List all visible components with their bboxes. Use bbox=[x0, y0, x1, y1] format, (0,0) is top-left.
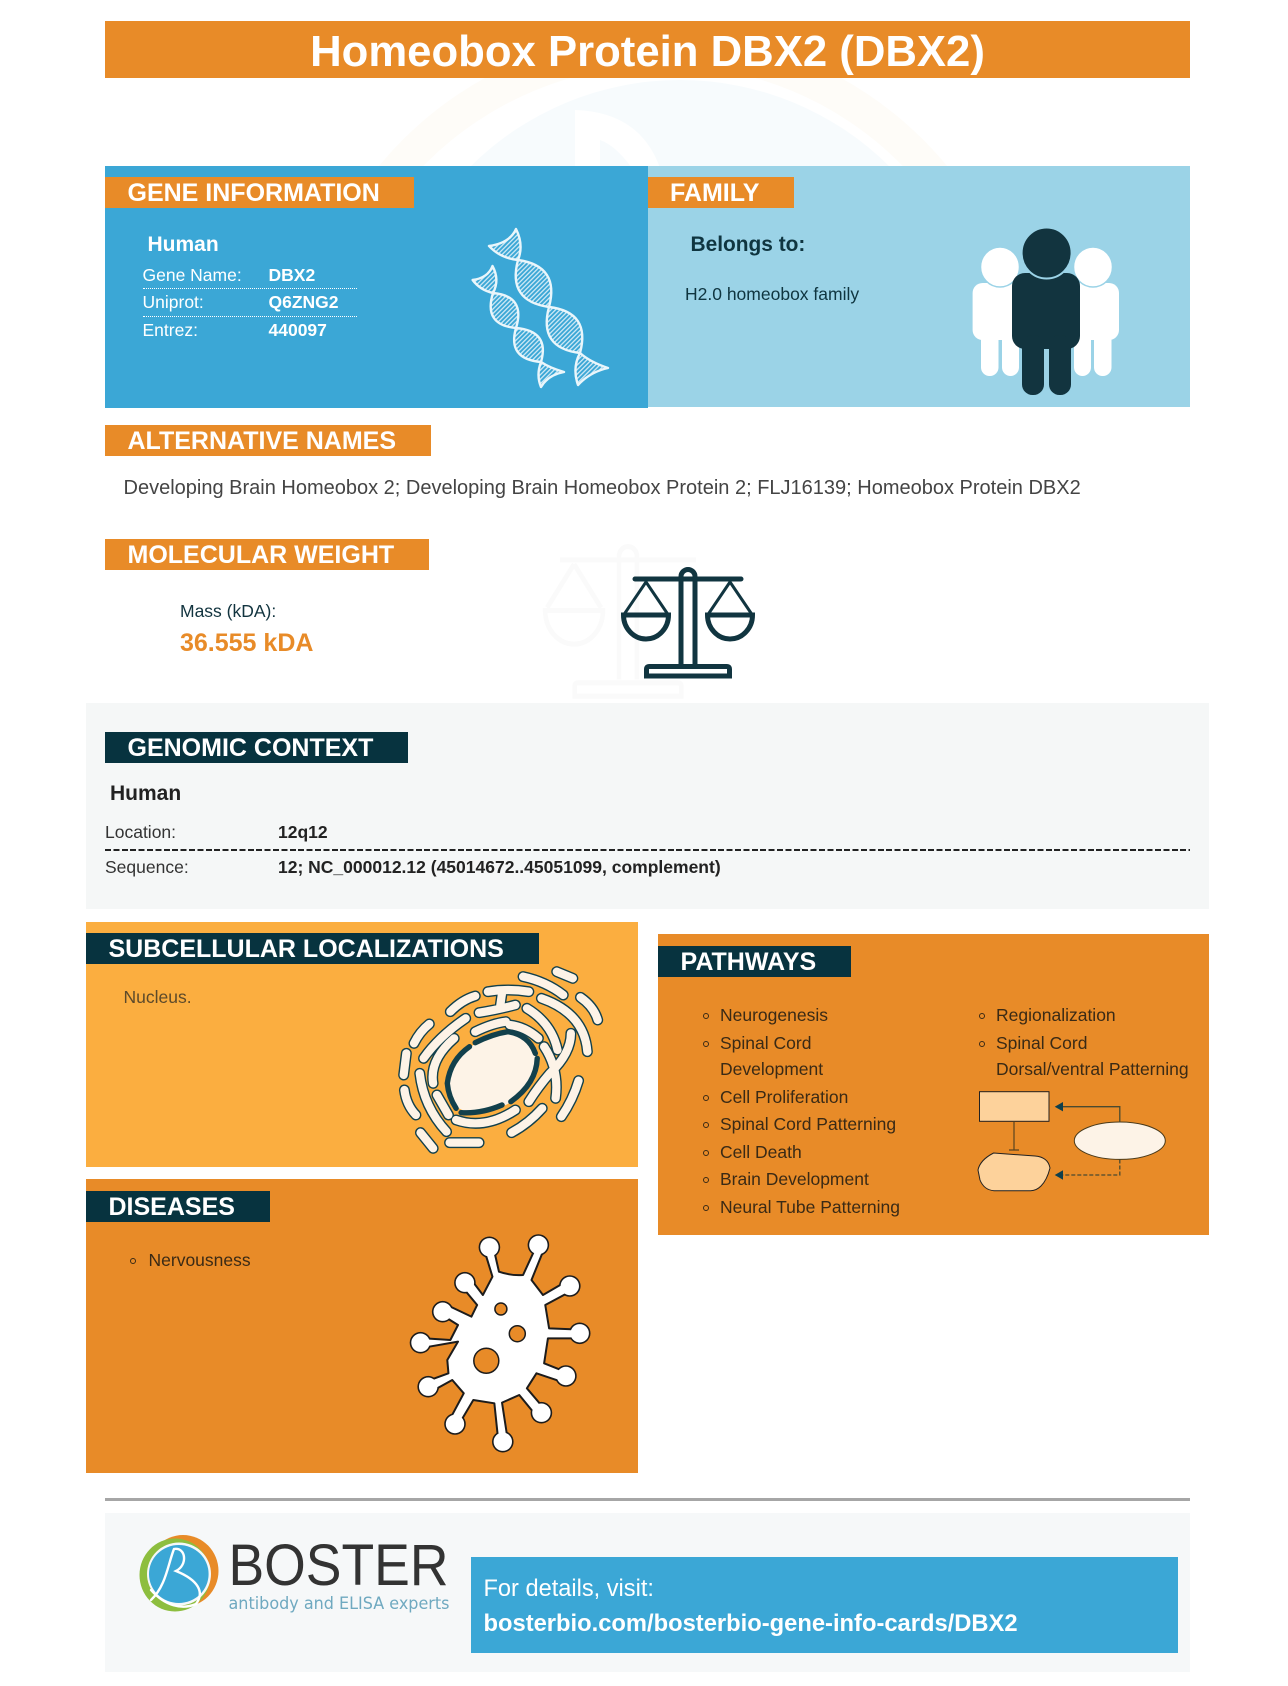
logo: Boster bbox=[140, 1533, 450, 1614]
call to action label: For details, visit: bbox=[484, 1576, 654, 1602]
panel: pathways bbox=[658, 934, 1209, 1235]
panel: family bbox=[648, 166, 1190, 406]
panel: diseases bbox=[86, 1179, 638, 1473]
icon: balance scales bbox=[621, 567, 755, 678]
watermark: faint logo behind title bbox=[370, 78, 960, 168]
uniprot row: Uniprot: bbox=[142, 292, 204, 312]
location row bbox=[105, 822, 328, 842]
entrez row: 440097 bbox=[268, 320, 327, 340]
logo mark bbox=[140, 1535, 218, 1612]
heading: family bbox=[648, 177, 794, 208]
panel: subcellular localizations bbox=[86, 922, 638, 1167]
entrez row bbox=[142, 320, 327, 340]
heading: family: FAMILY bbox=[670, 179, 759, 207]
icon: DNA double helix bbox=[471, 228, 610, 388]
list: pathways right column: Spinal Cord bbox=[996, 1033, 1087, 1053]
list: pathways right column bbox=[979, 1005, 1189, 1079]
call to action box bbox=[471, 1557, 1178, 1653]
list: pathways left column: Development bbox=[720, 1059, 823, 1079]
icon: virus bbox=[410, 1234, 590, 1452]
text: localization: Nucleus. bbox=[124, 987, 192, 1007]
icon: pathway diagram bbox=[978, 1091, 1166, 1192]
sequence row: 12; NC_000012.12 (45014672..45051099, complement) bbox=[278, 857, 721, 877]
panel: genomic context bbox=[86, 703, 1209, 909]
location row: Location: bbox=[105, 822, 176, 842]
divider bbox=[143, 316, 357, 317]
heading: diseases: DISEASES bbox=[108, 1193, 235, 1221]
list: pathways left column: Spinal Cord bbox=[720, 1033, 811, 1053]
list: pathways left column bbox=[703, 1005, 900, 1217]
gene name row: Gene Name: bbox=[142, 264, 242, 284]
footer rule bbox=[105, 1498, 1190, 1501]
mass value: 36.555 kDA bbox=[180, 629, 313, 657]
panel: gene information bbox=[105, 166, 648, 408]
call to action link: bosterbio.com/bosterbio-gene-info-cards/DBX2 bbox=[484, 1611, 1018, 1637]
species label: Human bbox=[110, 782, 181, 805]
icon: group of people bbox=[972, 228, 1119, 395]
watermark: faint scales bbox=[535, 540, 720, 702]
list: pathways right column: Dorsal/ventral Patterning bbox=[996, 1059, 1189, 1079]
location row: 12q12 bbox=[278, 822, 328, 842]
heading: gene information: GENE INFORMATION bbox=[128, 179, 380, 207]
list: diseases: Nervousness bbox=[148, 1250, 251, 1270]
divider bbox=[143, 288, 357, 289]
entrez row: Entrez: bbox=[142, 320, 198, 340]
list: pathways left column: Neurogenesis bbox=[720, 1005, 828, 1025]
title: Homeobox Protein DBX2 (DBX2) bbox=[310, 27, 985, 76]
text: alternative names: Developing Brain Homeobox 2; Developing Brain Homeobox Protein 2; FLJ16139; Homeobox Protein DBX2 bbox=[124, 477, 1081, 499]
heading: genomic context: GENOMIC CONTEXT bbox=[128, 734, 373, 762]
panel: footer bbox=[105, 1513, 1190, 1672]
list: pathways left column: Spinal Cord Patterning bbox=[720, 1114, 896, 1134]
belongs to label: Belongs to: bbox=[690, 233, 805, 256]
heading: pathways: PATHWAYS bbox=[680, 948, 816, 976]
heading: diseases bbox=[86, 1191, 270, 1222]
gene name row bbox=[142, 264, 315, 284]
list: pathways left column: Neural Tube Patterning bbox=[720, 1197, 900, 1217]
icon: cell with nucleus bbox=[398, 966, 604, 1154]
dashed divider bbox=[105, 849, 1190, 851]
heading: subcellular localizations: SUBCELLULAR LOCALIZATIONS bbox=[108, 935, 504, 963]
mass label: Mass (kDA): bbox=[180, 600, 276, 620]
sequence row: Sequence: bbox=[105, 857, 189, 877]
title bbox=[105, 21, 1190, 78]
uniprot row bbox=[142, 292, 339, 312]
gene name row: DBX2 bbox=[268, 264, 315, 284]
heading: molecular weight: MOLECULAR WEIGHT bbox=[128, 541, 394, 569]
heading: alternative names: ALTERNATIVE NAMES bbox=[128, 427, 396, 455]
list: pathways left column: Cell Proliferation bbox=[720, 1087, 848, 1107]
uniprot row: Q6ZNG2 bbox=[268, 292, 339, 312]
list: pathways left column: Cell Death bbox=[720, 1142, 802, 1162]
species label: Human bbox=[148, 233, 219, 256]
list: pathways right column: Regionalization bbox=[996, 1005, 1116, 1025]
list: pathways left column: Brain Development bbox=[720, 1169, 869, 1189]
heading: pathways bbox=[658, 946, 851, 977]
family name: H2.0 homeobox family bbox=[685, 284, 859, 304]
